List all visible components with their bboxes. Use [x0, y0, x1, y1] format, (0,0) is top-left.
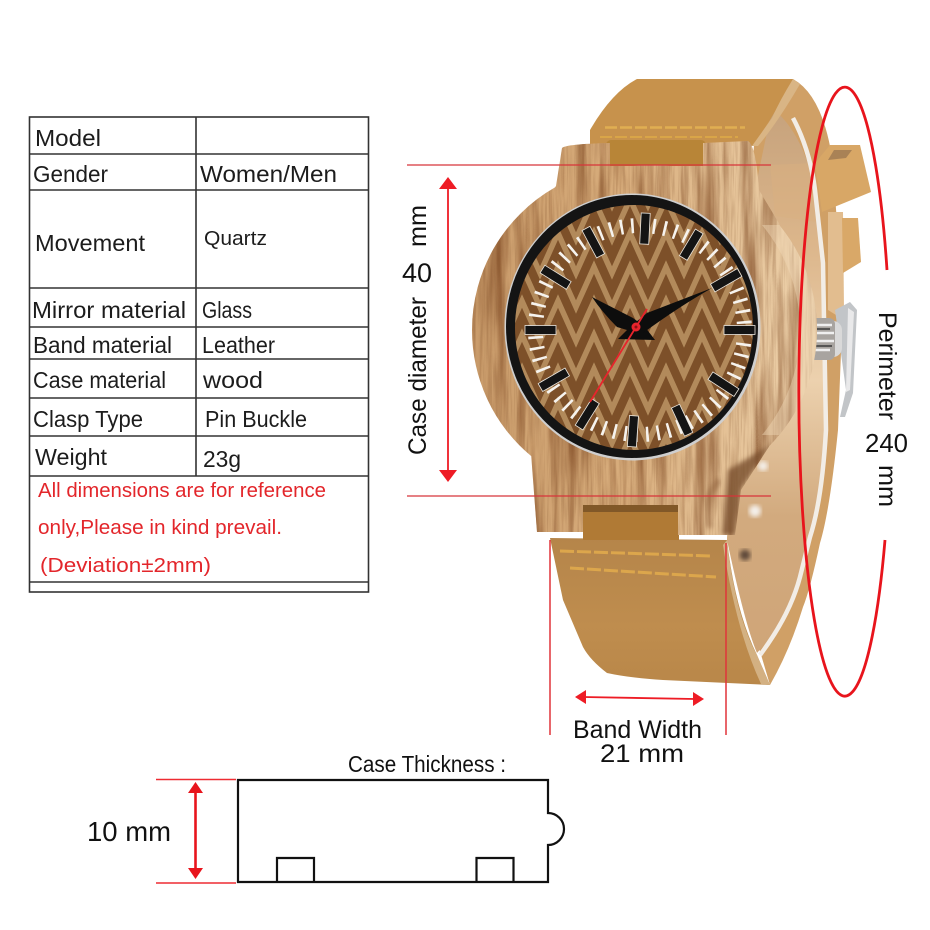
table row values: Pin Buckle	[205, 406, 307, 432]
disclaimer note	[38, 479, 326, 577]
label: band width: Band Width	[573, 716, 702, 744]
watch dial	[504, 194, 760, 460]
table row values: 23g	[203, 446, 241, 472]
table row labels: Gender	[33, 161, 108, 187]
table row labels: Case material	[33, 367, 166, 393]
upper strap	[590, 79, 800, 170]
arrow: band width	[575, 690, 704, 706]
buckle	[835, 302, 857, 417]
table row labels: Model	[35, 125, 101, 151]
label: mm: mm	[873, 465, 901, 507]
perimeter guide	[799, 87, 908, 696]
arrow: thickness	[188, 782, 203, 879]
arrow: diameter	[439, 177, 457, 482]
thickness guide lines	[156, 780, 236, 883]
table row labels: Band material	[33, 332, 172, 358]
crown	[806, 318, 842, 360]
table row values: Women/Men	[200, 161, 337, 187]
label: case thickness: Case Thickness :	[348, 751, 506, 777]
spec table	[30, 117, 368, 592]
case side outline	[238, 780, 564, 882]
label: mm: mm	[404, 205, 432, 247]
ellipse: perimeter	[799, 87, 887, 696]
table row values: Glass	[202, 297, 252, 323]
hour markers	[525, 213, 755, 447]
disclaimer note: All dimensions are for reference	[38, 479, 326, 502]
dial face	[515, 205, 753, 450]
case thickness diagram	[87, 751, 564, 883]
disclaimer note: only,Please in kind prevail.	[38, 516, 282, 539]
watch hands	[590, 288, 712, 402]
table row values	[200, 161, 337, 472]
table row labels: Clasp Type	[33, 406, 143, 432]
lower strap	[550, 505, 770, 685]
case diameter guide	[402, 165, 771, 496]
rear strap and keepers	[727, 79, 871, 685]
label: case diameter: Case diameter	[404, 297, 432, 455]
disclaimer note: (Deviation±2mm)	[40, 554, 211, 577]
table row values: Leather	[202, 332, 275, 358]
label: 21 mm: 21 mm	[600, 740, 684, 768]
table row labels: Movement	[35, 230, 146, 256]
label: 240: 240	[865, 428, 908, 458]
label: perimeter: Perimeter	[873, 312, 901, 420]
table row values: wood	[202, 367, 263, 393]
label: 40: 40	[402, 258, 432, 288]
table row labels: Mirror material	[32, 297, 186, 323]
wooden case	[472, 141, 817, 535]
bezel ring	[504, 194, 760, 460]
watch photo	[460, 79, 871, 685]
label: 10 mm: 10 mm	[87, 816, 171, 847]
minute ticks	[532, 222, 748, 438]
table row values: Quartz	[204, 228, 267, 250]
table row labels	[32, 125, 186, 470]
table row labels: Weight	[35, 444, 108, 470]
band width guide	[550, 540, 726, 768]
